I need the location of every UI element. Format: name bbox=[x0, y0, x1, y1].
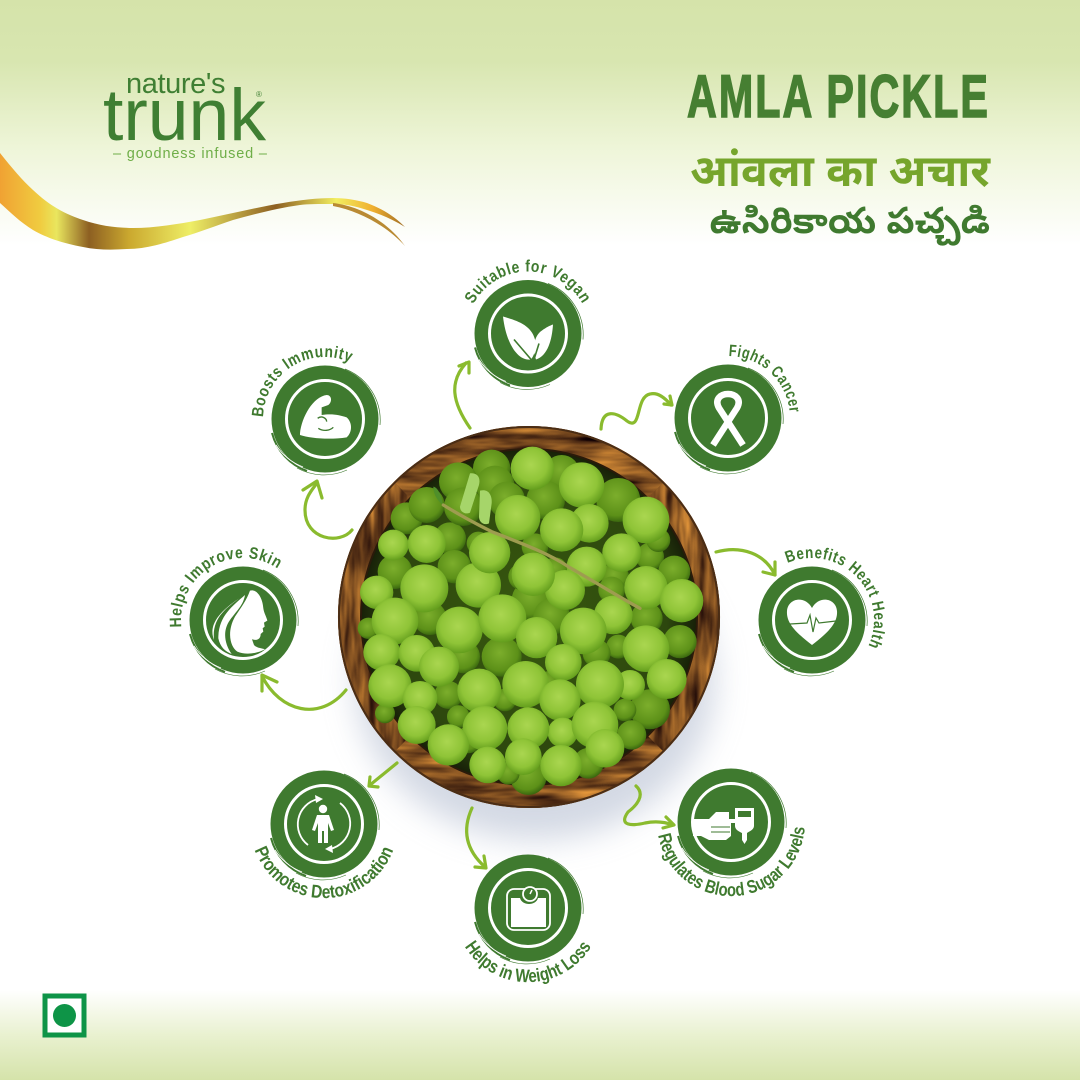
badge: benefits heart health bbox=[758, 548, 885, 676]
amla berries bbox=[358, 447, 703, 795]
icon: person with cycle arrows bbox=[298, 795, 350, 853]
badge: promotes detoxification bbox=[254, 770, 394, 898]
label: Benefits Heart Health bbox=[784, 548, 885, 648]
icon: leaves bbox=[503, 316, 553, 360]
icon: flexed arm bbox=[300, 395, 351, 439]
title: Telugu: ఉసిరికాయ పచ్చడి bbox=[710, 200, 990, 246]
bowl rim bbox=[338, 426, 720, 808]
badge: helps improve skin bbox=[170, 547, 299, 676]
badge: boosts immunity bbox=[252, 346, 381, 476]
label: Helps Improve Skin bbox=[170, 547, 281, 627]
badge: helps in weight loss bbox=[465, 854, 590, 984]
icon: finger prick device bbox=[693, 808, 754, 844]
top background gradient bbox=[0, 0, 1080, 245]
logo: nature's trunk: trunk bbox=[103, 75, 266, 156]
badge: suitable for vegan bbox=[465, 260, 589, 390]
arrow: to immunity bbox=[303, 481, 352, 538]
arrow: to skin bbox=[262, 675, 346, 709]
arrow: to blood sugar bbox=[625, 786, 674, 828]
icon: ribbon bbox=[713, 394, 743, 445]
label: Promotes Detoxification bbox=[254, 846, 394, 898]
arrow: to cancer bbox=[601, 394, 672, 429]
icon: weighing scale bbox=[507, 887, 550, 930]
bowl interior bbox=[361, 449, 697, 785]
label: Suitable for Vegan bbox=[465, 260, 589, 303]
badge: fights cancer bbox=[674, 344, 798, 474]
bottom background gradient bbox=[0, 990, 1080, 1080]
veg mark bbox=[45, 996, 84, 1035]
gold swoosh bbox=[0, 153, 405, 250]
arrow: to heart health bbox=[716, 550, 775, 575]
label: Boosts Immunity bbox=[252, 346, 353, 416]
title: Hindi: आंवला का अचार bbox=[690, 147, 991, 196]
icon: woman profile bbox=[212, 590, 267, 654]
arrow: to vegan bbox=[455, 362, 470, 428]
label: Helps in Weight Loss bbox=[465, 940, 590, 984]
leaves and twig bbox=[433, 473, 640, 608]
wooden bowl with amla berries bbox=[338, 426, 720, 808]
label: Regulates Blood Sugar Levels bbox=[658, 827, 805, 896]
label: Fights Cancer bbox=[729, 344, 798, 412]
bowl shadow bbox=[355, 520, 715, 840]
logo: nature's trunk: ® bbox=[256, 90, 262, 99]
logo: nature's trunk: – goodness infused – bbox=[113, 146, 268, 162]
badge: regulates blood sugar levels bbox=[658, 768, 805, 896]
arrow: to weight loss bbox=[467, 808, 486, 868]
logo: nature's trunk: nature's bbox=[126, 68, 225, 100]
icon: heart with pulse bbox=[787, 600, 837, 645]
arrow: to detoxification bbox=[369, 763, 397, 787]
